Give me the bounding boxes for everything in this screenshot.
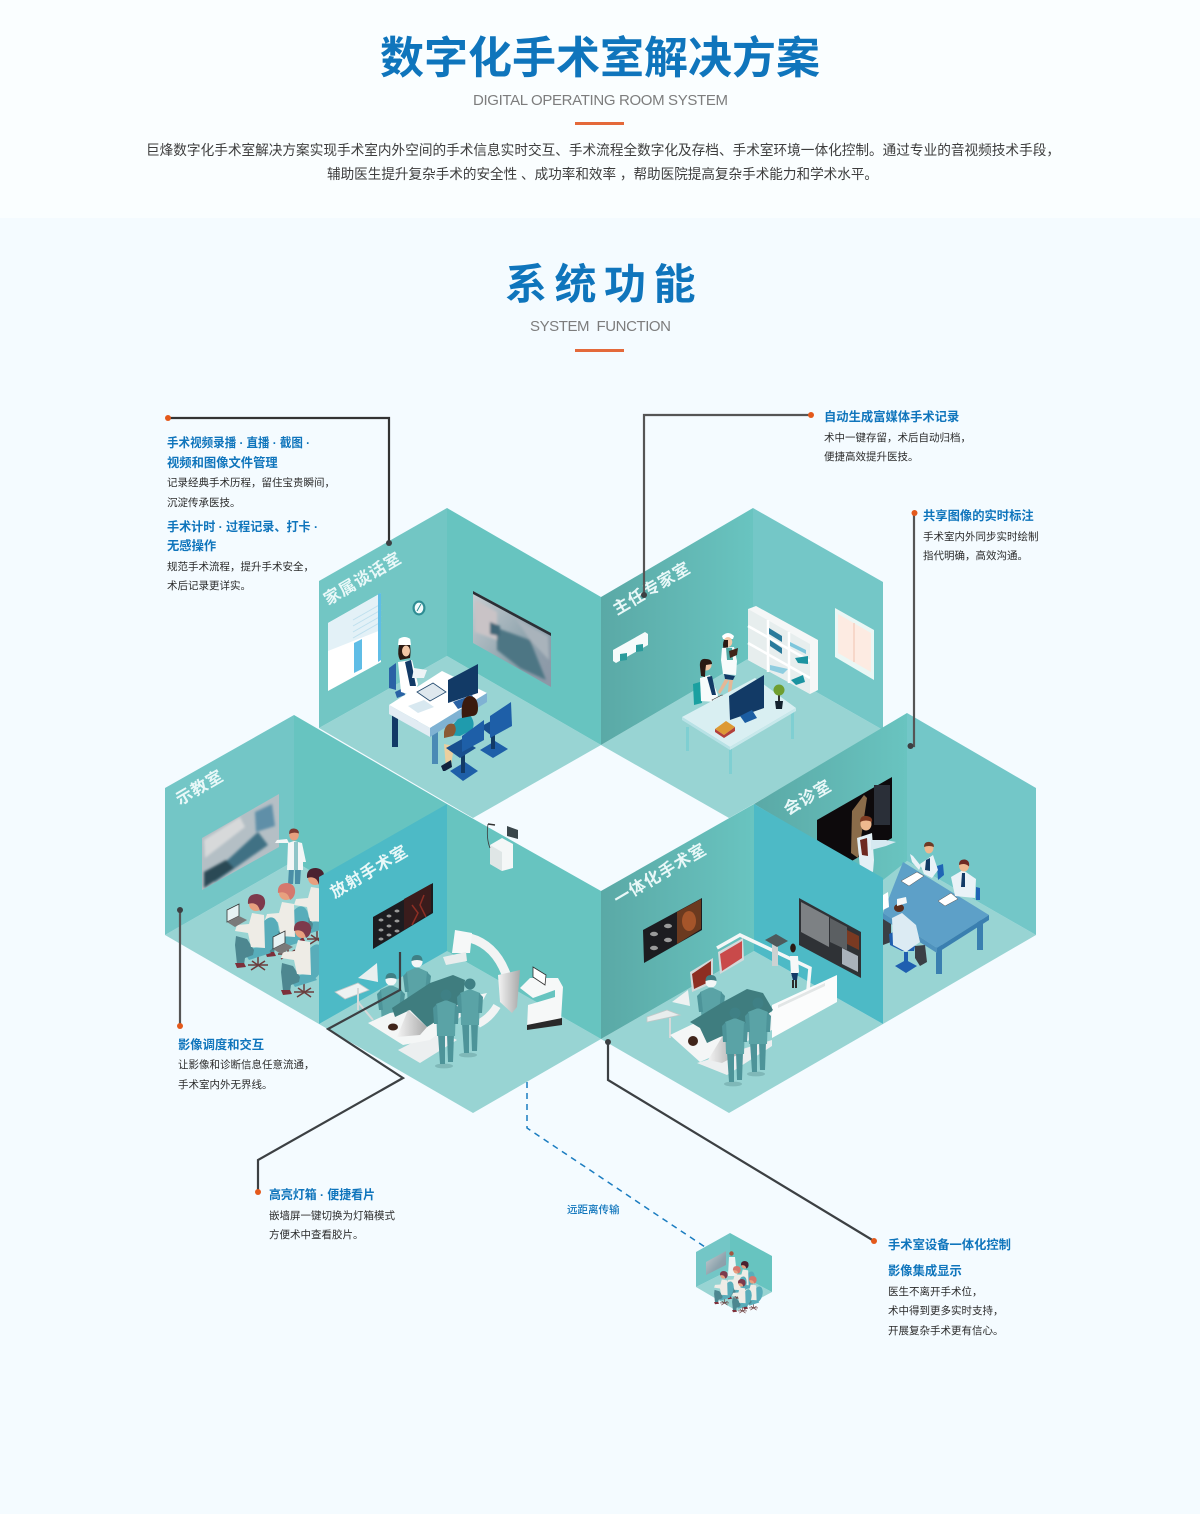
seated doctor bbox=[693, 659, 730, 707]
wall display: surgery video bbox=[473, 591, 551, 687]
window with curtains bbox=[835, 608, 874, 680]
desk bbox=[389, 671, 487, 764]
mini display bbox=[706, 1251, 726, 1275]
accent bar bbox=[575, 122, 624, 125]
mini teacher bbox=[728, 1251, 737, 1276]
floor bbox=[165, 861, 450, 1024]
leader line: annotation bbox=[908, 510, 918, 749]
room name: 一体化手术室 bbox=[610, 839, 710, 909]
floor bbox=[319, 951, 601, 1113]
control console bbox=[520, 967, 563, 1030]
C-arm system bbox=[443, 930, 520, 1024]
leader line: integrated control bbox=[605, 1039, 877, 1244]
room: radiology operating room bbox=[319, 804, 601, 1113]
doctor bbox=[389, 637, 446, 701]
wall display: surgery video bbox=[202, 794, 279, 890]
callout: video recording and timing: 无感操作 bbox=[167, 538, 216, 553]
room name: 会诊室 bbox=[780, 775, 835, 819]
room name: 家属谈话室 bbox=[320, 548, 405, 609]
subtitle: DIGITAL OPERATING ROOM SYSTEM bbox=[473, 92, 728, 109]
right wall bbox=[447, 508, 601, 745]
callout: video recording and timing: 记录经典手术历程，留住宝贵瞬间， bbox=[167, 476, 335, 489]
floor bbox=[696, 1270, 772, 1311]
callout: integrated control: 术中得到更多实时支持， bbox=[888, 1304, 1004, 1317]
desk with monitor, plant and books bbox=[682, 675, 796, 774]
right wall bbox=[753, 508, 883, 730]
wall display: large diagnostic bbox=[799, 898, 861, 978]
left wall bbox=[754, 713, 907, 880]
callout: rich media record bbox=[824, 409, 971, 463]
standing nurse bbox=[790, 944, 799, 988]
room name: 主任专家室 bbox=[609, 557, 694, 619]
dashed line: remote transmission bbox=[527, 1082, 705, 1247]
callout: video recording and timing: 手术计时 · 过程记录、打卡 · bbox=[167, 519, 318, 534]
introduction paragraph: 巨烽数字化手术室解决方案实现手术室内外空间的手术信息实时交互、手术流程全数字化及存档、手术室环境一体化控制。通过专业的音视频技术手段， bbox=[146, 142, 1060, 158]
room name: 放射手术室 bbox=[326, 841, 411, 902]
back surgical team bbox=[377, 955, 431, 1026]
left wall bbox=[601, 804, 754, 1039]
callout: integrated control bbox=[888, 1237, 1011, 1337]
room: family meeting room bbox=[319, 508, 601, 818]
heading: 系统功能 bbox=[505, 261, 703, 308]
callout: video recording and timing: 术后记录更详实。 bbox=[167, 579, 251, 592]
callout: rich media record: 术中一键存留，术后自动归档， bbox=[824, 431, 971, 444]
monitor bbox=[448, 664, 478, 709]
callout: image routing: 影像调度和交互 bbox=[178, 1037, 264, 1052]
bookcase bbox=[748, 606, 818, 694]
wall display: medical image bbox=[817, 777, 892, 862]
wall shelf bbox=[613, 632, 648, 663]
left wall bbox=[165, 715, 294, 935]
floor bbox=[601, 951, 883, 1113]
front surgical team bbox=[722, 998, 771, 1086]
background: top section bbox=[0, 0, 1200, 218]
floor bbox=[319, 656, 601, 818]
endoscope tower bbox=[487, 824, 518, 871]
operating table and patient bbox=[670, 989, 773, 1075]
left wall bbox=[601, 508, 753, 745]
callout: real-time annotation: 共享图像的实时标注 bbox=[923, 508, 1034, 523]
callout: real-time annotation bbox=[923, 508, 1038, 562]
room: director expert room bbox=[601, 508, 883, 818]
room: consultation room bbox=[754, 713, 1036, 1024]
callout: image routing: 手术室内外无界线。 bbox=[178, 1078, 272, 1091]
callout: video recording and timing: 沉淀传承医技。 bbox=[167, 496, 240, 509]
callout: integrated control: 手术室设备一体化控制 bbox=[888, 1237, 1011, 1252]
callout: video recording and timing: 手术视频录播 · 直播 · 截图 · bbox=[167, 435, 310, 450]
label: remote transmission: 远距离传输 bbox=[567, 1203, 620, 1216]
callout: video recording and timing: 规范手术流程，提升手术安全， bbox=[167, 560, 314, 573]
left wall bbox=[696, 1233, 730, 1287]
leader line: light box bbox=[255, 952, 403, 1195]
wall display: radiology images bbox=[373, 883, 433, 949]
remote teaching room thumbnail bbox=[696, 1233, 772, 1313]
shadowless lamp bbox=[647, 990, 690, 1038]
callout: integrated control: 医生不离开手术位， bbox=[888, 1285, 982, 1298]
callout: real-time annotation: 手术室内外同步实时绘制 bbox=[923, 530, 1038, 543]
callout: rich media record: 便捷高效提升医技。 bbox=[824, 450, 918, 463]
title: 数字化手术室解决方案 bbox=[380, 34, 820, 83]
heading subtitle: SYSTEM FUNCTION bbox=[530, 318, 671, 335]
right wall bbox=[447, 804, 601, 1039]
callout: video recording and timing: 视频和图像文件管理 bbox=[167, 455, 278, 470]
room: integrated operating room bbox=[601, 804, 883, 1113]
callout: video recording and timing bbox=[167, 435, 335, 592]
leader line: media record bbox=[641, 412, 814, 598]
header: solution introduction bbox=[146, 34, 1060, 182]
callout: light box: 高亮灯箱 · 便捷看片 bbox=[269, 1187, 375, 1202]
right wall bbox=[907, 713, 1036, 935]
back surgeon bbox=[697, 975, 725, 1028]
introduction paragraph bbox=[146, 142, 1060, 182]
wall clock bbox=[412, 600, 426, 616]
accent bar bbox=[575, 349, 624, 352]
mini audience bbox=[714, 1261, 764, 1313]
window with blinds bbox=[328, 593, 381, 691]
callout: light box: 方便术中查看胶片。 bbox=[269, 1228, 364, 1241]
floor bbox=[883, 861, 1036, 1024]
white cabinet bbox=[772, 975, 837, 1038]
callout: light box bbox=[269, 1187, 395, 1241]
right wall bbox=[294, 715, 447, 951]
callout: image routing bbox=[178, 1037, 314, 1091]
room name: 示教室 bbox=[172, 765, 227, 809]
wall display: left bbox=[643, 898, 702, 963]
presenting doctor bbox=[857, 816, 896, 872]
front surgical team bbox=[433, 978, 483, 1068]
shadowless lamp bbox=[335, 963, 378, 1020]
standing nurse bbox=[718, 633, 738, 694]
left wall bbox=[319, 508, 447, 728]
introduction paragraph: 辅助医生提升复杂手术的安全性 、成功率和效率 ，帮助医院提高复杂手术能力和学术水平。 bbox=[327, 166, 878, 182]
teacher bbox=[275, 828, 306, 884]
room: teaching room bbox=[165, 715, 450, 1024]
floor bbox=[601, 656, 883, 818]
operating table and patient bbox=[368, 975, 487, 1063]
seated doctors bbox=[889, 842, 980, 973]
callout: light box: 嵌墙屏一键切换为灯箱模式 bbox=[269, 1209, 395, 1222]
right wall bbox=[754, 804, 883, 1024]
leader line: video recording bbox=[165, 415, 392, 546]
callout: rich media record: 自动生成富媒体手术记录 bbox=[824, 409, 959, 424]
left wall bbox=[319, 804, 447, 1024]
right wall bbox=[730, 1233, 772, 1292]
callout: integrated control: 开展复杂手术更有信心。 bbox=[888, 1324, 1004, 1337]
section heading: system function bbox=[505, 261, 703, 352]
callout: real-time annotation: 指代明确，高效沟通。 bbox=[923, 549, 1028, 562]
students bbox=[227, 868, 341, 997]
pendant and surgical monitors bbox=[690, 934, 810, 992]
patient relative with chairs bbox=[441, 696, 512, 781]
leader line: image routing bbox=[177, 907, 183, 1029]
callout: image routing: 让影像和诊断信息任意流通， bbox=[178, 1058, 314, 1071]
meeting table bbox=[883, 862, 989, 974]
callout: integrated control: 影像集成显示 bbox=[888, 1263, 962, 1278]
